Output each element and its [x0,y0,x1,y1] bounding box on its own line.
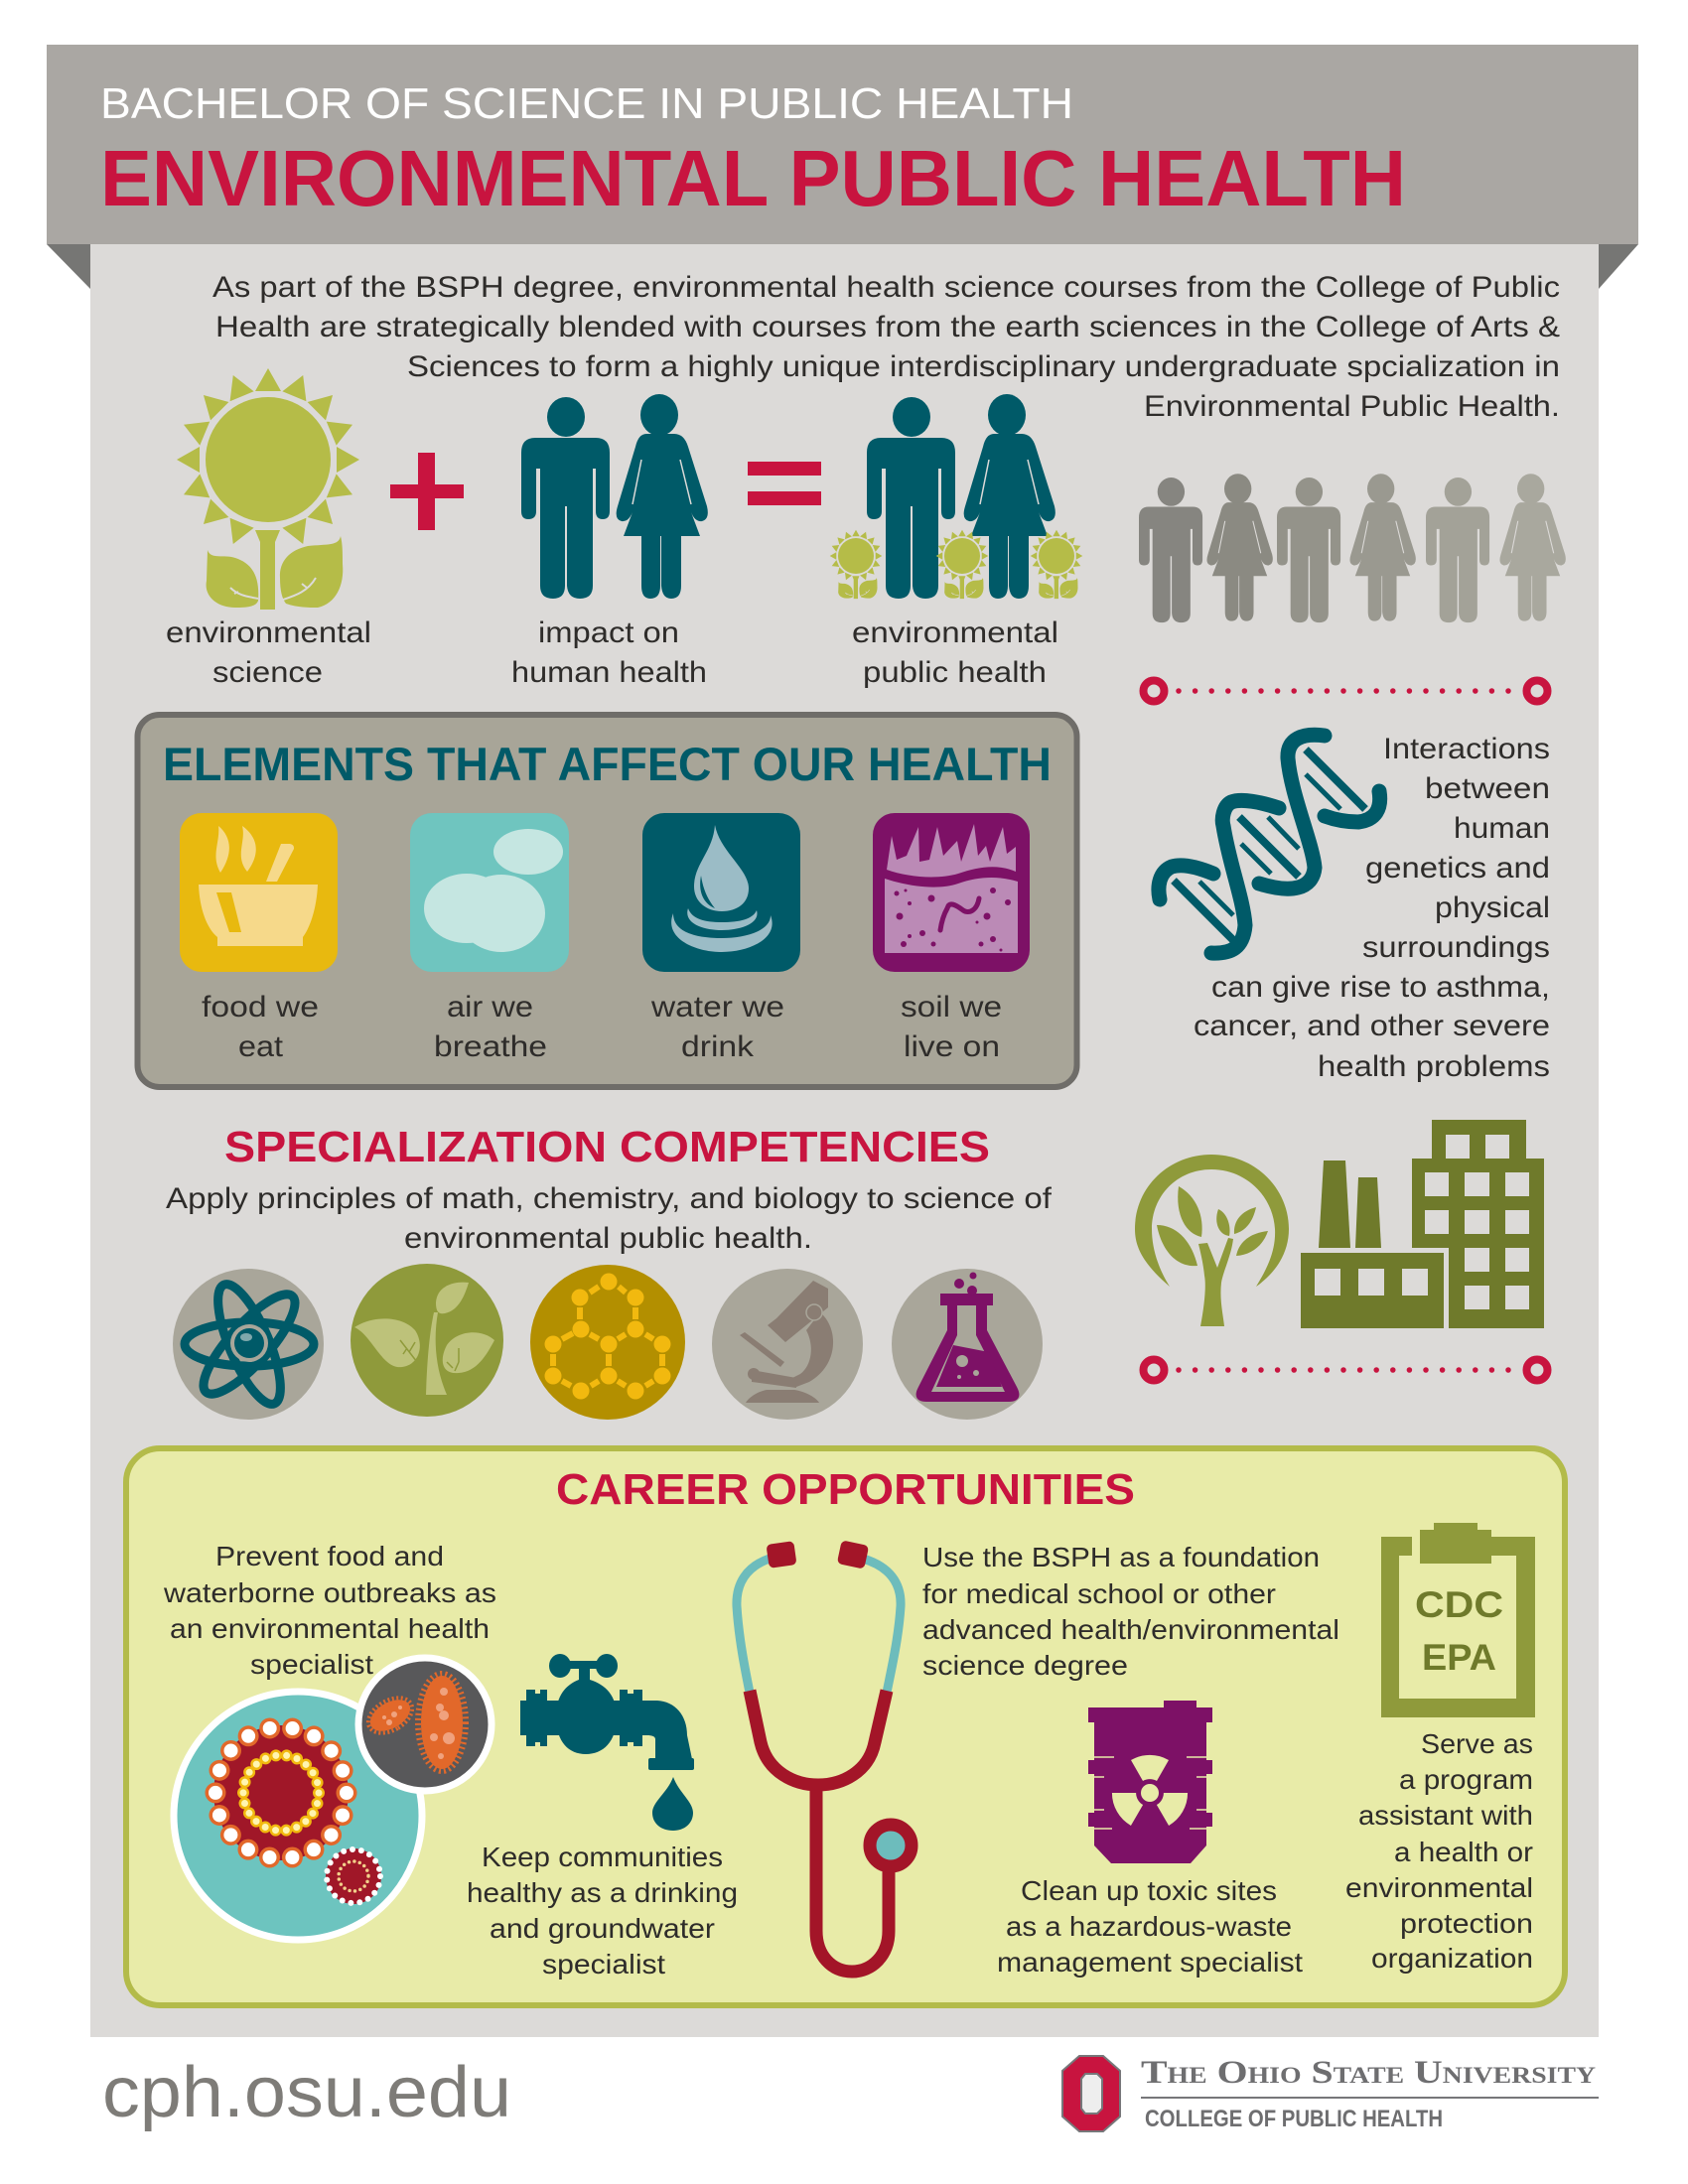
genetics text: surroundings [1362,931,1550,964]
icon: soil [873,813,1030,972]
foundation text [922,1542,1339,1681]
icon: food [180,813,338,972]
program assistant text: environmental [1345,1872,1533,1903]
genetics text: Interactions [1383,733,1550,765]
genetics text: genetics and [1365,852,1550,885]
dotted divider [1144,1360,1547,1380]
icon: stethoscope [737,1540,912,1972]
main body panel [90,244,1599,2037]
equation labels: environmental [852,616,1058,649]
element labels: air we [447,991,533,1024]
equation labels: human health [511,656,707,689]
equation labels: environmental [166,616,371,649]
intro text: Health are strategically blended with courses from the earth sciences in the College of Arts & [215,311,1560,343]
icon: faucet and drop [520,1654,694,1831]
icon: man and woman [521,394,708,599]
university wordmark [1141,2055,1599,2132]
icon: air [410,813,569,972]
equals sign [748,462,821,505]
icon: plant [351,1264,503,1417]
icon: clipboard CDC EPA [1381,1523,1535,1717]
genetics text [1194,733,1550,1083]
icon: water [642,813,800,972]
genetics text: human [1454,812,1550,845]
element labels: eat [238,1030,284,1063]
icon: row of grey people [1139,474,1566,622]
foundation text: for medical school or other [922,1578,1276,1609]
icon: factory and office building [1301,1120,1544,1328]
heading: specialization competencies: SPECIALIZATION COMPETENCIES [224,1123,990,1171]
equation labels [166,616,1058,689]
title: ENVIRONMENTAL PUBLIC HEALTH [100,134,1406,222]
panel: career opportunities [126,1448,1565,2005]
equation labels: impact on [538,616,679,649]
toxic cleanup text: as a hazardous-waste [1006,1911,1292,1942]
element labels: live on [904,1030,1000,1063]
icon: atom [173,1269,324,1420]
plus sign [390,453,464,530]
genetics text: cancer, and other severe [1194,1010,1550,1042]
toxic cleanup text: Clean up toxic sites [1021,1875,1277,1906]
competencies text: environmental public health. [404,1222,812,1255]
icon: microscope [712,1269,863,1420]
icon: DNA helix [1159,735,1380,953]
equation labels: science [212,656,323,689]
water specialist text: Keep communities [482,1842,723,1872]
foundation text: Use the BSPH as a foundation [922,1542,1320,1572]
water specialist text: healthy as a drinking [467,1877,738,1908]
university wordmark: COLLEGE OF PUBLIC HEALTH [1145,2106,1443,2132]
icon: molecule [530,1265,685,1420]
icon: clipboard CDC EPA: EPA [1422,1637,1496,1678]
subtitle: BACHELOR OF SCIENCE IN PUBLIC HEALTH [100,79,1073,128]
intro text: Sciences to form a highly unique interdisciplinary undergraduate spcialization in [407,350,1560,383]
food outbreak text: specialist [250,1649,373,1680]
intro text [212,271,1560,423]
heading: CAREER OPPORTUNITIES [556,1465,1135,1514]
program assistant text [1345,1728,1533,1974]
program assistant text: a program [1399,1764,1533,1795]
element labels: soil we [901,991,1002,1024]
university wordmark: The Ohio State University [1141,2055,1596,2091]
intro text: As part of the BSPH degree, environmental health science courses from the College of Public [212,271,1560,304]
foundation text: science degree [922,1650,1128,1681]
foundation text: advanced health/environmental [922,1614,1339,1645]
water specialist text: specialist [542,1949,665,1979]
food outbreak text [163,1541,496,1680]
genetics text: health problems [1318,1050,1550,1083]
food outbreak text: Prevent food and [215,1541,444,1571]
program assistant text: organization [1371,1943,1533,1974]
toxic cleanup text: management specialist [997,1947,1303,1978]
water specialist text: and groundwater [490,1913,715,1944]
icon: flask [892,1269,1043,1420]
element labels: food we [202,991,319,1024]
genetics text: between [1425,772,1550,805]
program assistant text: protection [1400,1908,1533,1939]
header banner [47,45,1638,289]
element labels: breathe [434,1030,547,1063]
element labels [202,991,1002,1063]
panel: elements that affect our health [137,715,1076,1087]
toxic cleanup text [997,1875,1303,1978]
genetics text: physical [1435,891,1550,924]
food outbreak text: waterborne outbreaks as [163,1577,496,1608]
icon: sunflower [177,368,359,610]
water specialist text [467,1842,738,1979]
footer url: cph.osu.edu [102,2053,511,2132]
program assistant text: a health or [1394,1837,1533,1867]
icon: tree in arc [1135,1155,1289,1326]
icon: clipboard CDC EPA: CDC [1415,1584,1503,1625]
equation labels: public health [863,656,1047,689]
icon: Ohio State block O [1062,2056,1120,2131]
program assistant text: Serve as [1421,1728,1533,1759]
icon: pathogens [174,1658,492,1940]
program assistant text: assistant with [1358,1800,1533,1831]
food outbreak text: an environmental health [170,1613,490,1644]
dotted divider [1144,681,1547,701]
competencies text: Apply principles of math, chemistry, and biology to science of [166,1182,1053,1215]
element labels: water we [650,991,784,1024]
element labels: drink [681,1030,755,1063]
heading: ELEMENTS THAT AFFECT OUR HEALTH [163,738,1052,790]
icon: hazardous waste barrel [1088,1701,1212,1863]
icon: people with sunflowers [830,394,1082,599]
intro text: Environmental Public Health. [1144,390,1560,423]
competencies text [166,1182,1053,1255]
genetics text: can give rise to asthma, [1211,971,1550,1004]
